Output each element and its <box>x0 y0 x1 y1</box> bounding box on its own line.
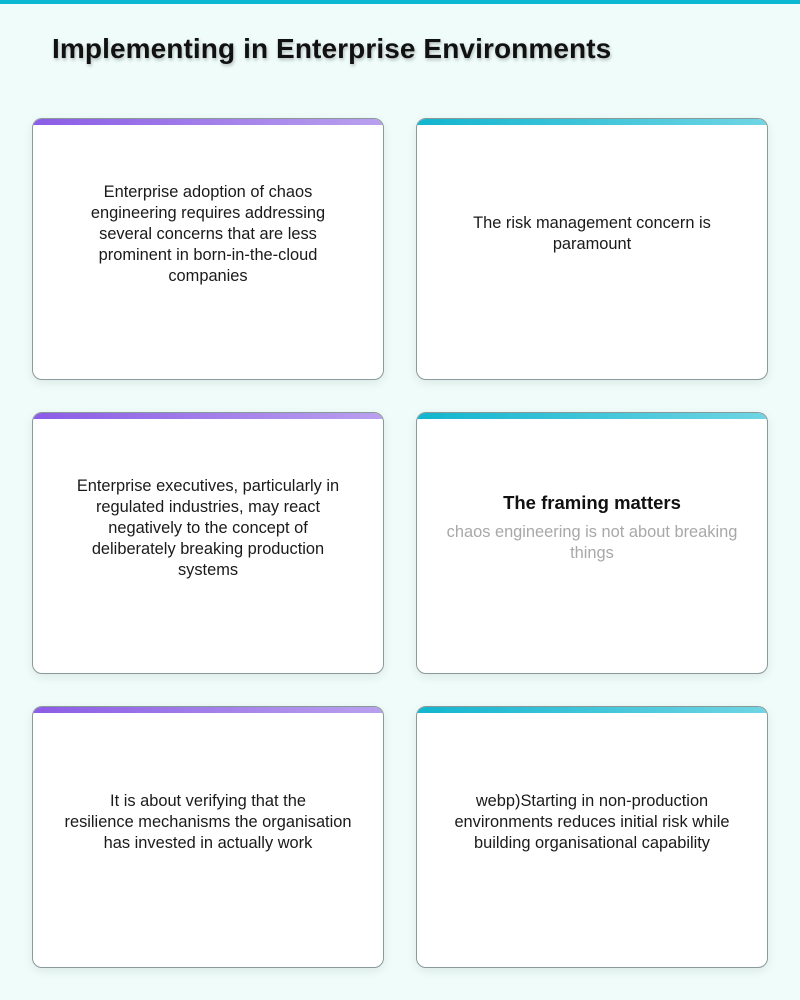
panel: executives: negatively to the concept of <box>108 518 308 536</box>
panel: enterprise adoption: companies <box>168 266 248 284</box>
panel: framing matters: things <box>570 544 614 562</box>
title: Implementing in Enterprise Environments <box>52 33 611 64</box>
panel: executives: deliberately breaking production <box>92 540 324 558</box>
panel: executives <box>32 412 384 674</box>
panel: executives: Enterprise executives, particularly in <box>77 476 339 494</box>
panel: non-production start: environments reduces initial risk while <box>454 812 730 830</box>
panel: verifying resilience: has invested in actually work <box>104 834 312 852</box>
panel: non-production start: webp)Starting in non-production <box>476 792 708 810</box>
panel: risk management <box>416 118 768 380</box>
panel: verifying resilience: It is about verifying that the <box>110 792 306 810</box>
panel: framing matters <box>416 412 768 674</box>
panel: enterprise adoption: engineering requires addressing <box>91 204 325 222</box>
panel: framing matters: The framing matters <box>503 492 681 513</box>
panel: executives: systems <box>178 560 238 578</box>
panel: enterprise adoption <box>32 118 384 380</box>
panel: non-production start <box>416 706 768 968</box>
panel: non-production start: building organisational capability <box>474 834 710 852</box>
panel: enterprise adoption: several concerns that are less <box>99 224 317 242</box>
panel: risk management: paramount <box>553 235 631 253</box>
panel: verifying resilience <box>32 706 384 968</box>
panel: verifying resilience: resilience mechanisms the organisation <box>64 812 351 830</box>
panel: enterprise adoption: prominent in born-in-the-cloud <box>99 246 317 264</box>
panel: framing matters: chaos engineering is not about breaking <box>447 523 737 541</box>
panel: risk management: The risk management concern is <box>473 214 711 232</box>
panel: enterprise adoption: Enterprise adoption of chaos <box>104 182 312 200</box>
panel: executives: regulated industries, may react <box>96 498 320 516</box>
